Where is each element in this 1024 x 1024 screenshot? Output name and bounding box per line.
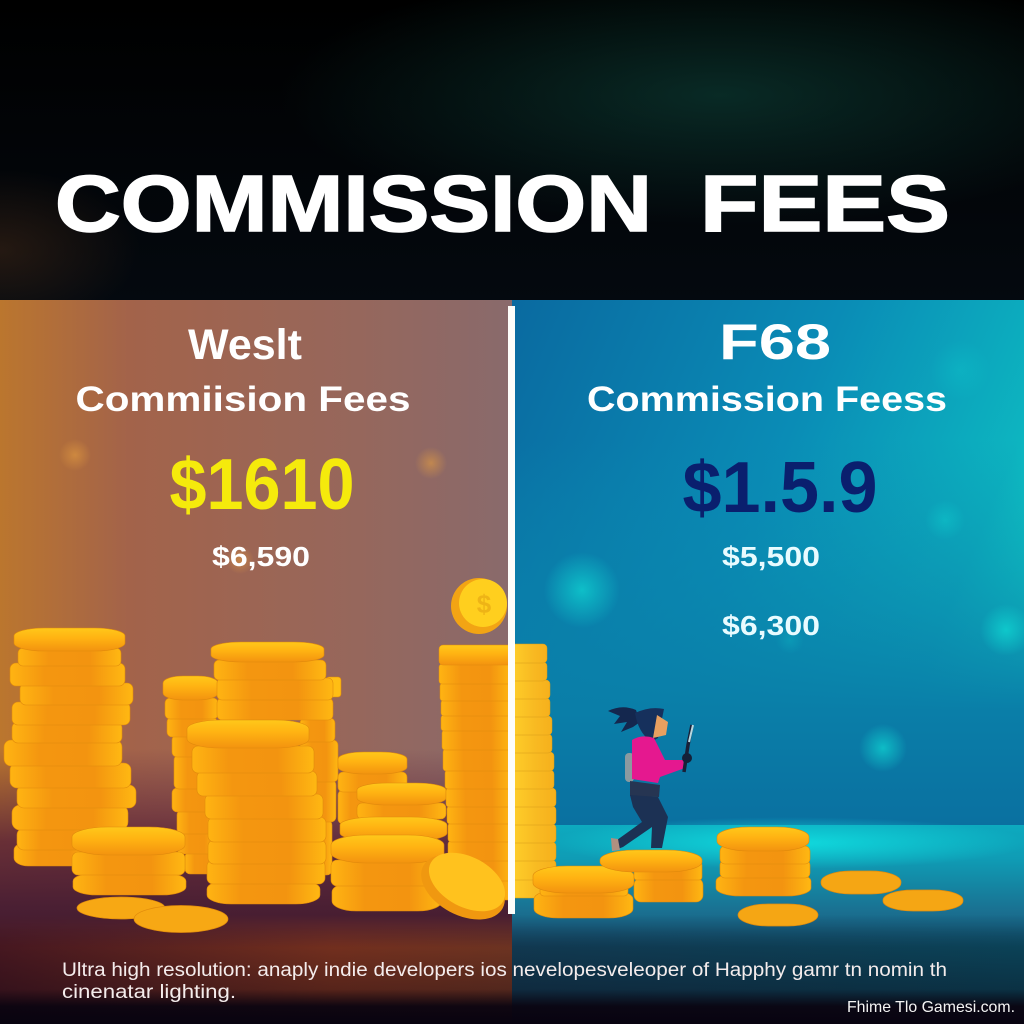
right panel heading: Commission Feess <box>587 380 947 419</box>
tilted coin <box>410 841 516 933</box>
left panel heading: Weslt <box>188 321 302 369</box>
right coin stack one <box>533 866 634 918</box>
left secondary value: $6,590 <box>212 541 310 572</box>
left coin stack six, front right <box>331 835 444 911</box>
tall coin stack crossing the divider <box>439 644 556 900</box>
right panel heading <box>587 314 947 419</box>
divider line <box>508 306 515 914</box>
falling coin: $ <box>477 589 492 619</box>
panel: left background <box>0 300 512 960</box>
right flat coins <box>738 871 963 926</box>
left coin stack seven, front left <box>72 827 186 895</box>
title <box>55 159 950 248</box>
right main value: $1.5.9 <box>682 448 878 528</box>
left coin stack five, front centre <box>187 720 326 904</box>
left coin stack three, tall <box>211 642 341 875</box>
flat coins on left floor <box>77 897 228 932</box>
left coin stack one <box>4 628 136 866</box>
right panel heading: F68 <box>719 314 831 370</box>
top dark header background <box>0 0 1024 330</box>
footer caption: cinenatar lighting. <box>62 982 236 1003</box>
left coin stack four, small <box>338 752 447 841</box>
footer caption: Ultra high resolution: anaply indie developers ios nevelopesveleoper of Happhy gamr tn nomin th <box>62 960 947 981</box>
right coin stack two <box>600 850 703 902</box>
left main value: $1610 <box>170 445 354 525</box>
left panel heading: Commiision Fees <box>76 380 410 419</box>
footer credit: Fhime Tlo Gamesi.com. <box>847 999 1015 1016</box>
panel: footer band background <box>0 915 1024 1024</box>
falling coin <box>451 578 507 634</box>
right secondary value two: $6,300 <box>722 610 820 641</box>
person running with phone <box>608 707 693 851</box>
right coin stack three <box>716 827 811 896</box>
left panel heading <box>76 321 410 419</box>
title: COMMISSION <box>55 159 652 248</box>
title: FEES <box>700 159 950 248</box>
left coin stack two, behind <box>163 676 219 874</box>
right secondary value one: $5,500 <box>722 541 820 572</box>
footer caption <box>62 960 947 1003</box>
panel: right background <box>512 300 1024 960</box>
